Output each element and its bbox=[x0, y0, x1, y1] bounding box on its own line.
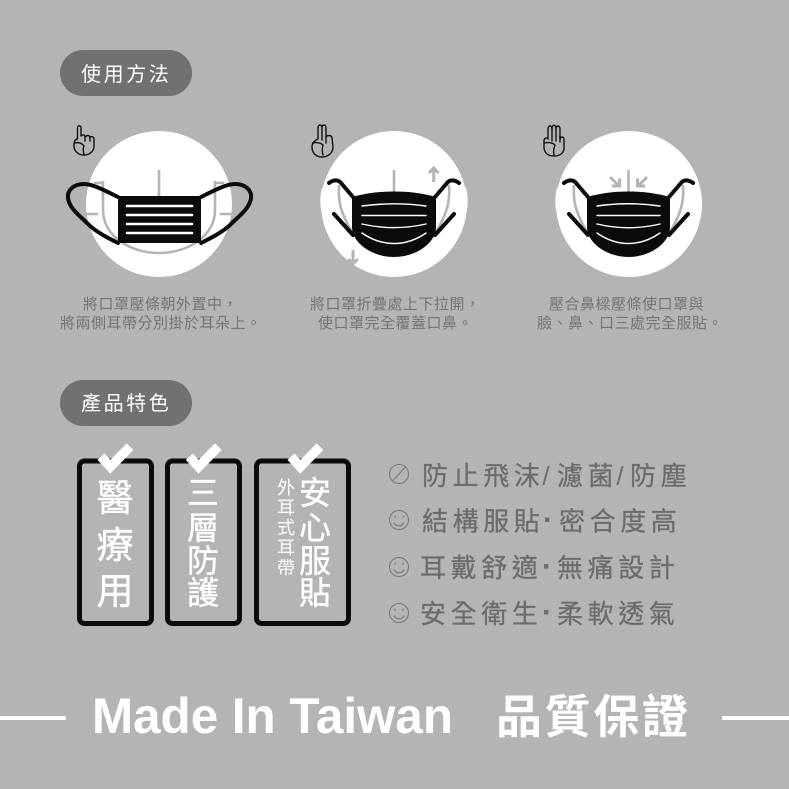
badge: three layer protection bbox=[168, 447, 240, 624]
feature: comfortable wear bbox=[390, 550, 679, 583]
feature: droplet and bacteria protection: / bbox=[542, 461, 550, 491]
feature: safe and soft bbox=[390, 596, 679, 629]
footer: made in Taiwan banner bbox=[0, 688, 789, 744]
badge: ear loops and fit bbox=[256, 447, 348, 624]
arrow: up bbox=[429, 168, 438, 182]
badge: ear loops and fit: 帶 bbox=[277, 558, 295, 578]
badge: ear loops and fit: 耳 bbox=[277, 538, 295, 558]
badge: three layer protection: 三 bbox=[187, 475, 219, 511]
panel: step 1 illustration bbox=[68, 131, 251, 277]
heading: usage: 使用方法 bbox=[81, 63, 171, 86]
caption: step 1: 將口罩壓條朝外置中， bbox=[83, 296, 238, 313]
caption: step 2 bbox=[310, 296, 481, 332]
arrow: press right bbox=[610, 177, 620, 186]
arrow: down bbox=[348, 250, 358, 264]
ears bbox=[555, 184, 702, 214]
badge: three layer protection: 護 bbox=[187, 575, 219, 611]
heading: features: 產品特色 bbox=[81, 392, 171, 415]
feature: safe and soft: 柔軟透氣 bbox=[557, 599, 679, 629]
badge: medical use: 醫 bbox=[96, 478, 134, 519]
badge: ear loops and fit: 服 bbox=[299, 543, 331, 579]
icon: one finger hand bbox=[74, 126, 94, 155]
feature: close fit: 結構服貼 bbox=[422, 506, 544, 536]
feature: comfortable wear: · bbox=[542, 550, 552, 583]
caption: step 1 bbox=[60, 296, 262, 332]
feature: droplet and bacteria protection: 濾菌 bbox=[557, 461, 618, 491]
caption: step 2: 使口罩完全覆蓋口鼻。 bbox=[318, 315, 473, 332]
feature: droplet and bacteria protection bbox=[390, 461, 691, 491]
feature: droplet and bacteria protection: / bbox=[616, 461, 624, 491]
badge: ear loops and fit: 外 bbox=[277, 478, 295, 498]
badge: ear loops and fit: 耳 bbox=[277, 498, 295, 518]
feature: droplet and bacteria protection: 防塵 bbox=[630, 461, 691, 491]
caption: step 1: 將兩側耳帶分別掛於耳朵上。 bbox=[60, 315, 262, 332]
panel: step 3 illustration bbox=[555, 131, 702, 277]
badge: ear loops and fit: 式 bbox=[277, 518, 295, 538]
badge: medical use bbox=[80, 447, 152, 624]
badge: medical use: 療 bbox=[96, 525, 134, 566]
ears bbox=[320, 184, 468, 214]
icon: three finger hand bbox=[544, 125, 564, 156]
caption: step 2: 將口罩折疊處上下拉開， bbox=[310, 296, 481, 313]
caption: step 3 bbox=[537, 296, 723, 332]
icon: two finger hand bbox=[312, 125, 333, 157]
footer: made in Taiwan banner: 品質保證 bbox=[496, 691, 688, 743]
feature: safe and soft: · bbox=[542, 596, 552, 629]
badge: three layer protection: 層 bbox=[187, 510, 219, 546]
badge: ear loops and fit: 心 bbox=[299, 510, 331, 546]
badge: three layer protection: 防 bbox=[187, 543, 219, 579]
feature: safe and soft: 安全衛生 bbox=[420, 599, 542, 629]
caption: step 3: 臉、鼻、口三處完全服貼。 bbox=[537, 315, 723, 332]
badge: ear loops and fit: 安 bbox=[299, 475, 331, 511]
feature: droplet and bacteria protection: 防止飛沫 bbox=[422, 461, 544, 491]
footer: made in Taiwan banner: Made In Taiwan bbox=[92, 688, 453, 744]
panel: step 2 illustration bbox=[320, 131, 468, 277]
arrow: press left bbox=[638, 177, 647, 186]
badge: medical use: 用 bbox=[96, 571, 134, 612]
badge: ear loops and fit: 貼 bbox=[299, 575, 331, 611]
feature: close fit: · bbox=[543, 504, 553, 536]
heading: usage bbox=[60, 50, 192, 96]
feature: close fit bbox=[390, 504, 681, 536]
caption: step 3: 壓合鼻樑壓條使口罩與 bbox=[549, 296, 704, 313]
feature: comfortable wear: 耳戴舒適 bbox=[420, 553, 542, 583]
heading: features bbox=[60, 380, 192, 426]
feature: comfortable wear: 無痛設計 bbox=[557, 553, 679, 583]
feature: close fit: 密合度高 bbox=[559, 506, 681, 536]
